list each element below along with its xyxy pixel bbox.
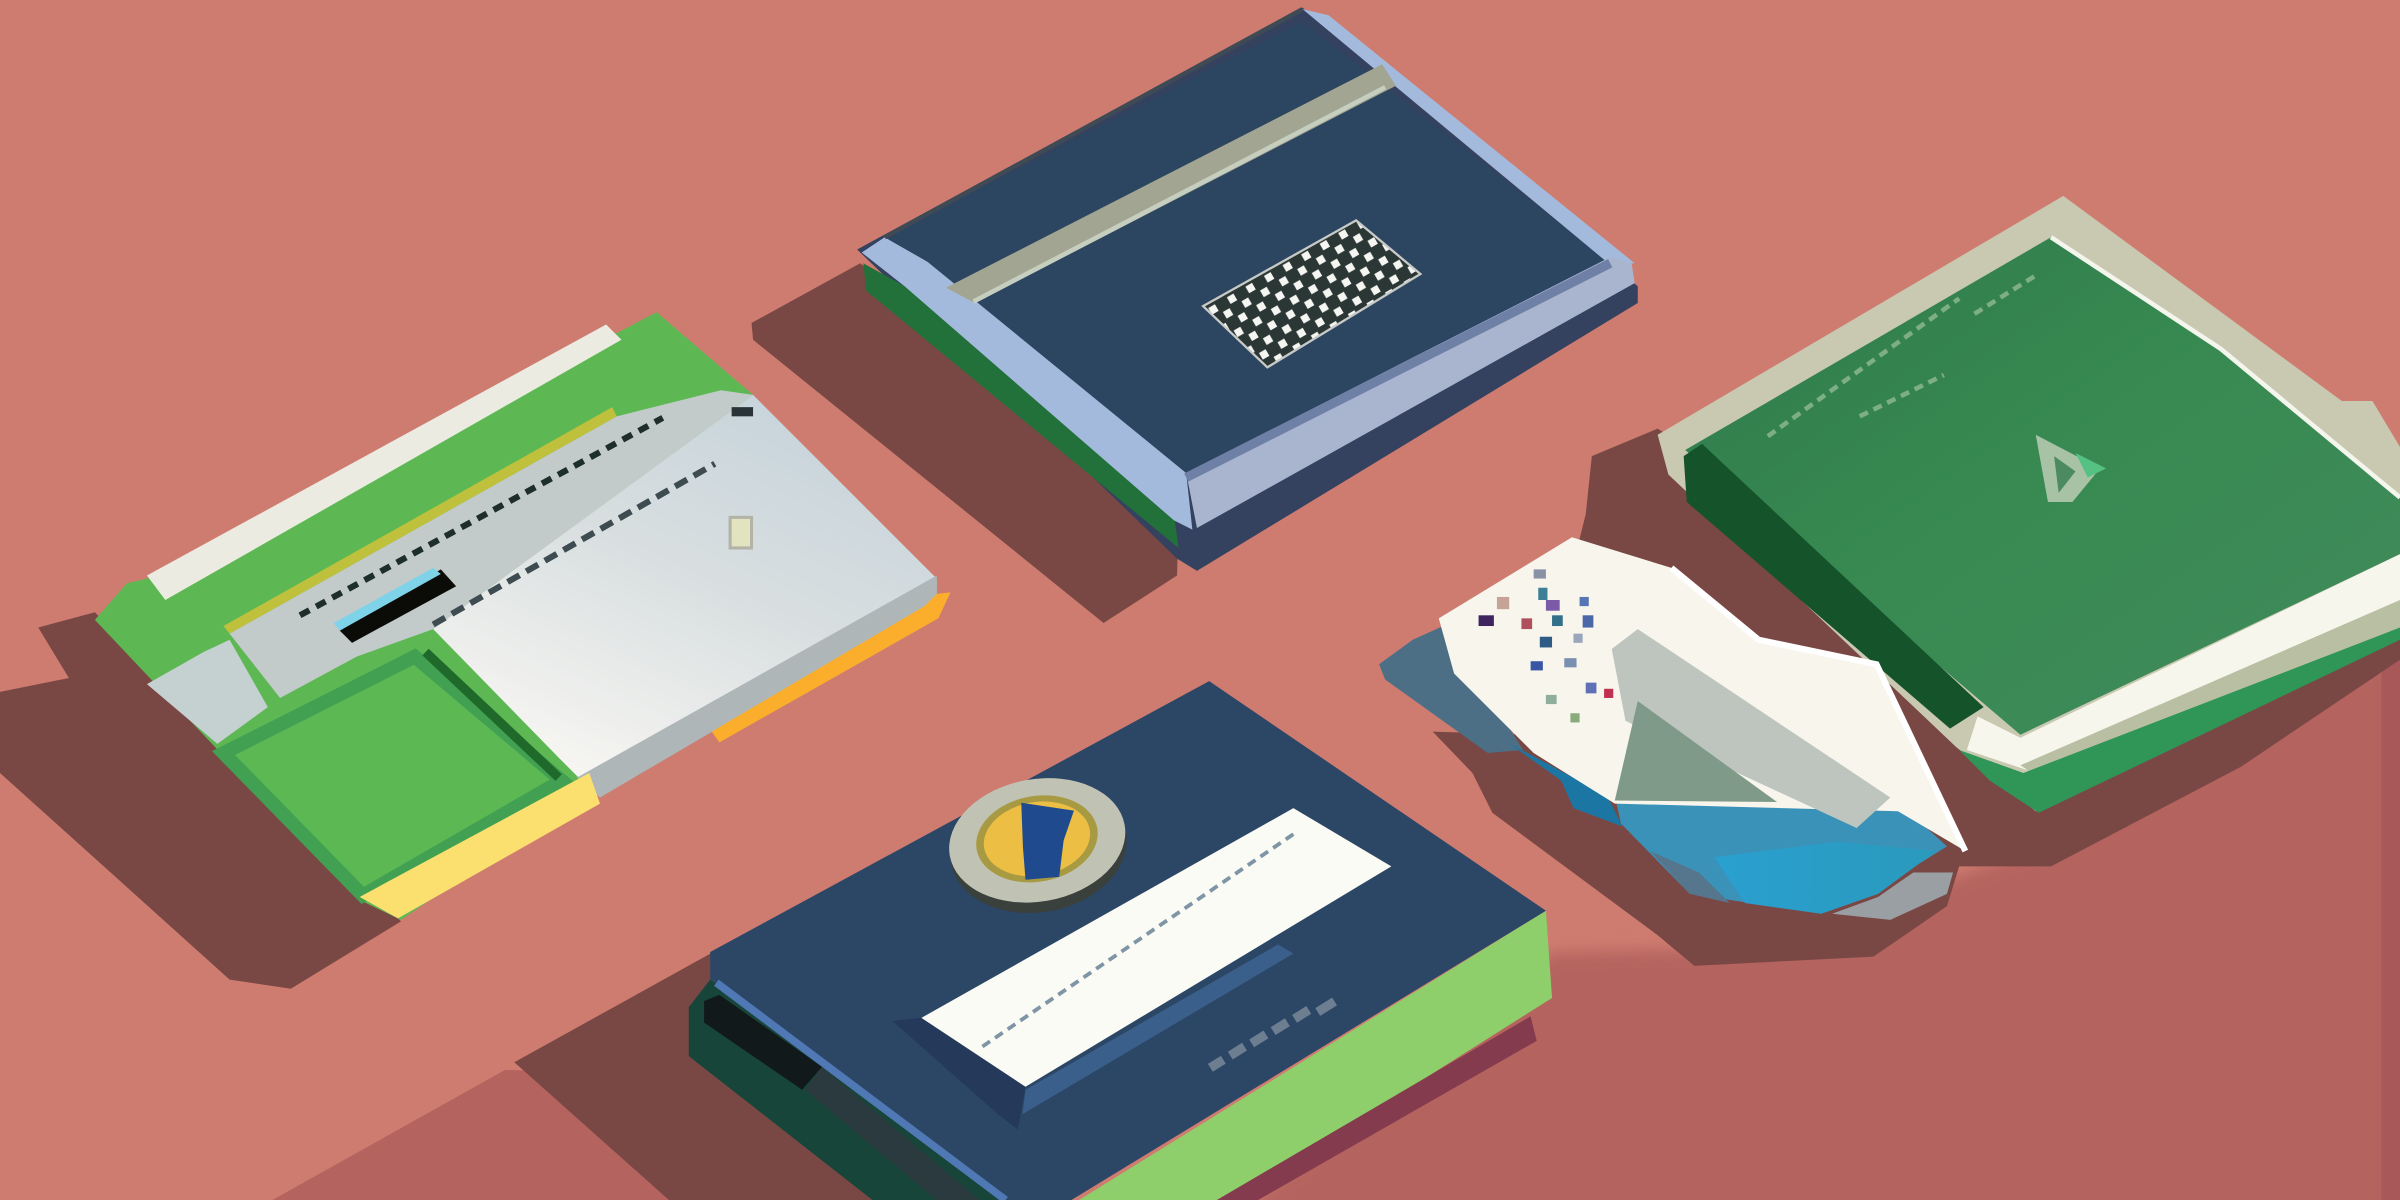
black slot with cyan stripe [334, 568, 456, 643]
faint text lines [1768, 276, 2036, 436]
white label [921, 808, 1391, 1087]
white edge line [2051, 237, 2400, 497]
lower green edge [1959, 628, 2400, 813]
dark green side [689, 980, 1018, 1200]
green side [863, 263, 1179, 548]
medallion [939, 765, 1137, 927]
shadow: top card [752, 263, 1179, 623]
light grey left block [147, 640, 268, 744]
dark blue back strip [1379, 624, 1523, 753]
blue base [1615, 796, 1947, 914]
grey corner [1832, 872, 1953, 920]
yellow accent line [223, 407, 617, 634]
card: right green [1658, 196, 2400, 813]
navy face [885, 21, 1610, 473]
small knob [730, 517, 752, 548]
grey band [230, 390, 753, 698]
charcoal side band [805, 1067, 980, 1200]
paper: folded receipt [1379, 537, 1965, 920]
green fold triangle [1615, 701, 1777, 802]
maroon underside [1217, 1016, 1537, 1200]
side dark base [857, 8, 1638, 571]
lighter band beside label [1022, 944, 1293, 1114]
logo mark [2036, 435, 2106, 502]
white outer band highlight [1671, 568, 1965, 851]
white top strip [147, 324, 621, 600]
dark panel edge [426, 652, 559, 778]
lower band shade [2020, 600, 2400, 781]
cream border [1658, 196, 2400, 811]
lavender lip [1186, 257, 1635, 528]
blue dark edge [1508, 742, 1622, 827]
card: bottom navy [689, 681, 1552, 1200]
lip soft inner edge [1186, 263, 1610, 478]
grey fold [1612, 629, 1890, 828]
card: left green and white [95, 312, 951, 920]
light blue left rim [862, 237, 1192, 530]
coloured text specks [1479, 569, 1613, 722]
black slot [704, 995, 822, 1090]
lower dashed line [433, 464, 715, 624]
dark top-left outline [885, 9, 1303, 237]
upper dashed line [300, 418, 663, 615]
orange edge [712, 592, 951, 742]
navy face [710, 681, 1546, 1200]
shadow: left card [0, 612, 401, 989]
white label shadow [892, 1018, 1026, 1130]
blue left edge [716, 983, 1006, 1200]
main white panel [433, 395, 937, 781]
card body [95, 312, 753, 920]
green face [1685, 237, 2400, 735]
small clip [732, 407, 753, 416]
lower green panel [223, 657, 562, 895]
white lower band [1967, 554, 2400, 773]
dark left wedge [1684, 444, 1984, 729]
tan strap [946, 64, 1396, 303]
white sheet [1439, 537, 1965, 851]
label text line [980, 834, 1293, 1048]
strap highlight [973, 87, 1385, 302]
light blue right rim [1303, 9, 1635, 265]
checkered vent [1203, 220, 1420, 367]
shadow: bottom card [514, 952, 888, 1200]
grey bottom edge [577, 576, 937, 797]
embossed wordmark marks [1208, 998, 1337, 1072]
yellow edge [360, 773, 600, 918]
shadow: right card and paper [1433, 429, 2400, 966]
card: top navy [857, 8, 1638, 571]
green side [1079, 911, 1552, 1200]
